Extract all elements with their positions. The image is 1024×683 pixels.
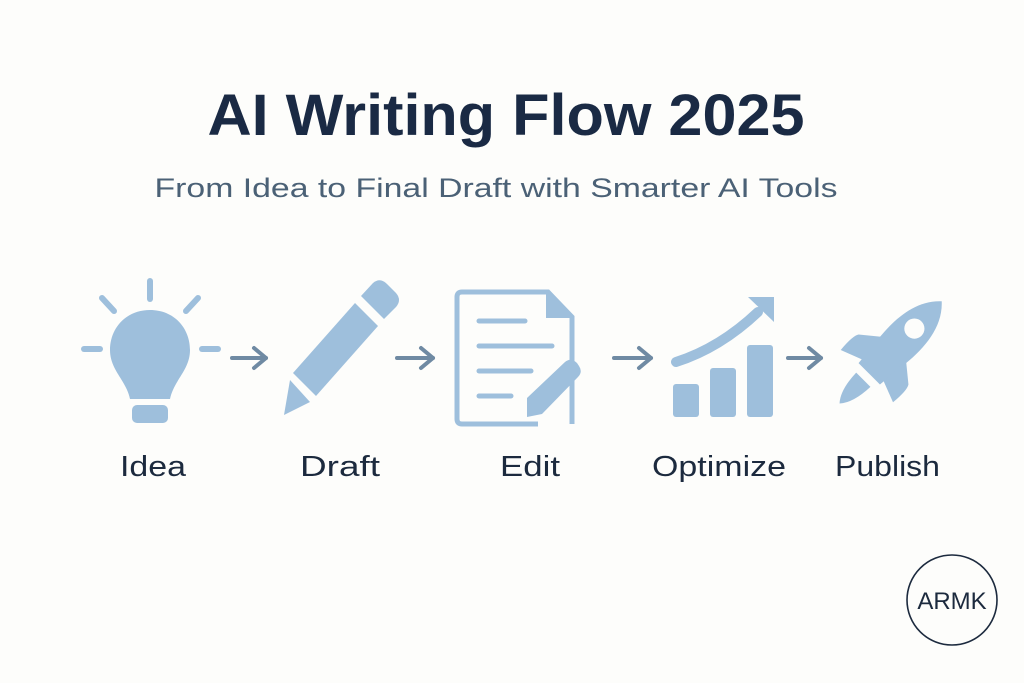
labels: Draft xyxy=(300,451,380,483)
arrow 2 xyxy=(397,348,433,368)
arrow 3 xyxy=(614,348,651,368)
icon: document edit xyxy=(457,292,581,424)
icon: growth chart xyxy=(673,297,774,417)
labels: Edit xyxy=(500,451,560,483)
subtitle: From Idea to Final Draft with Smarter AI Tools xyxy=(154,173,838,203)
badge: ARMK: ARMK xyxy=(917,588,987,615)
labels: Idea xyxy=(120,451,187,483)
labels xyxy=(120,451,940,483)
arrow 1 xyxy=(232,348,266,368)
labels: Optimize xyxy=(652,451,786,483)
title: AI Writing Flow 2025 xyxy=(208,83,804,148)
icon: light bulb xyxy=(84,281,218,423)
arrow 4 xyxy=(788,348,821,368)
labels: Publish xyxy=(835,451,940,483)
icon: pencil xyxy=(284,280,399,415)
badge: ARMK xyxy=(907,555,997,645)
icon: rocket xyxy=(813,275,968,430)
